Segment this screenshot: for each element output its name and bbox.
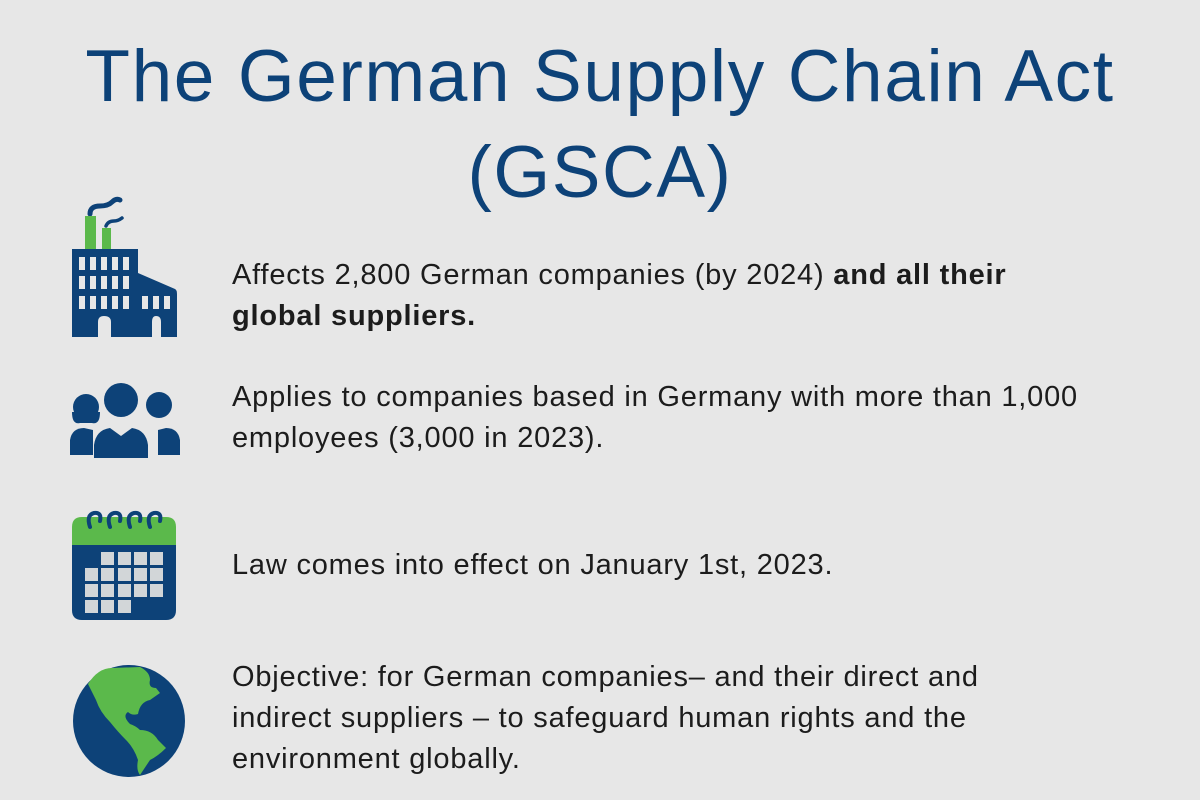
text: effective date: Law comes into effect on January 1st, 2023. bbox=[232, 549, 833, 581]
text: companies affected: global suppliers. bbox=[232, 300, 476, 332]
text: objective bbox=[232, 661, 979, 775]
icon: globe bbox=[73, 665, 185, 777]
title bbox=[85, 36, 1115, 213]
text: applies to: employees (3,000 in 2023). bbox=[232, 422, 604, 454]
text: applies to bbox=[232, 381, 1078, 454]
text: objective: environment globally. bbox=[232, 743, 521, 775]
text: companies affected bbox=[232, 259, 1006, 332]
icon: people bbox=[70, 383, 180, 458]
icon: calendar bbox=[72, 510, 176, 620]
text: applies to: Applies to companies based in Germany with more than 1,000 bbox=[232, 381, 1078, 413]
text: objective: Objective: for German companies– and their direct and bbox=[232, 661, 979, 693]
icon: factory bbox=[72, 196, 177, 337]
text: objective: indirect suppliers – to safeguard human rights and the bbox=[232, 702, 967, 734]
title: The German Supply Chain Act bbox=[85, 36, 1115, 117]
title: (GSCA) bbox=[467, 132, 733, 213]
text: companies affected: Affects 2,800 German companies (by 2024) and all their bbox=[232, 259, 1006, 291]
